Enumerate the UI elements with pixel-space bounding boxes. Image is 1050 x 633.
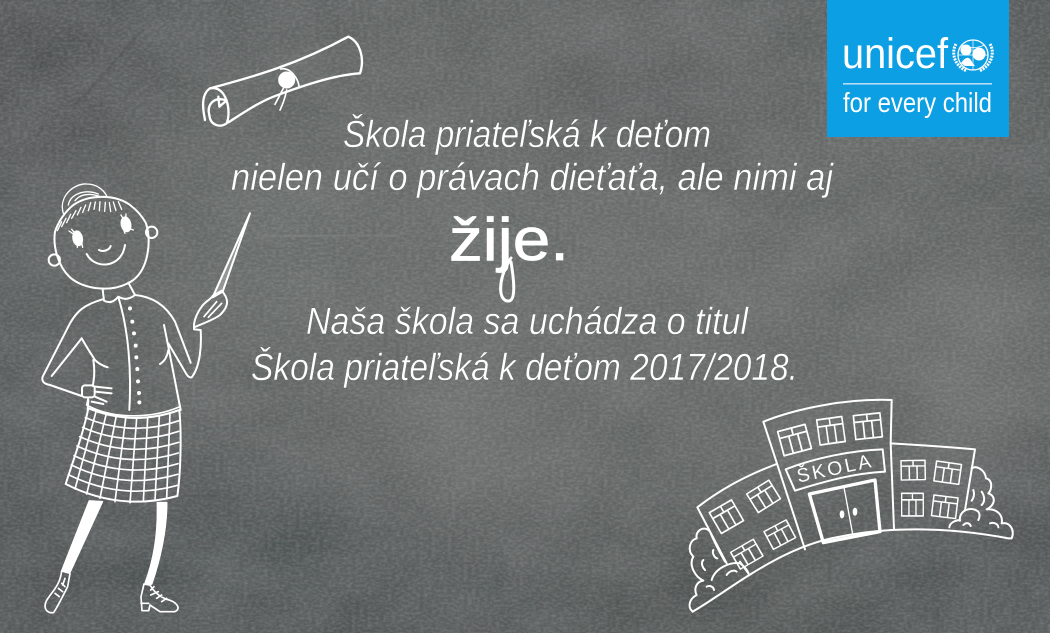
handwritten word [449, 206, 569, 301]
illustration: school building [690, 400, 1013, 612]
subheading: line 1: Naša škola sa uchádza o titul [306, 301, 749, 343]
logo wordmark: unicef [842, 30, 949, 78]
logo tagline: for every child [843, 87, 992, 118]
left bush [690, 529, 748, 612]
logo: unicef [827, 0, 1009, 137]
right wing [891, 443, 975, 510]
teacher hand and pointer [194, 291, 227, 329]
icon: diploma scroll [203, 37, 362, 126]
school sign: ŠKOLA [795, 449, 875, 488]
teacher head and hair [49, 184, 157, 289]
teacher collar and jacket [103, 283, 135, 302]
handwritten word: žije. [449, 206, 569, 273]
central block [763, 400, 894, 549]
logo divider [843, 83, 992, 85]
heading: line 2: nielen učí o právach dieťaťa, ale nimi aj [231, 157, 834, 199]
teacher buttons [128, 306, 141, 404]
school door [809, 480, 880, 543]
logo emblem [954, 40, 992, 71]
teacher skirt and legs [45, 390, 181, 613]
illustration: teacher [42, 184, 250, 613]
ground line [693, 529, 1008, 612]
heading: line 1: Škola priateľská k deťom [343, 112, 711, 156]
left wing [697, 464, 777, 573]
right bush [949, 467, 1013, 538]
teacher upper body [42, 184, 250, 410]
windows [709, 413, 961, 569]
subheading: line 2: Škola priateľská k deťom 2017/2018. [251, 345, 798, 389]
